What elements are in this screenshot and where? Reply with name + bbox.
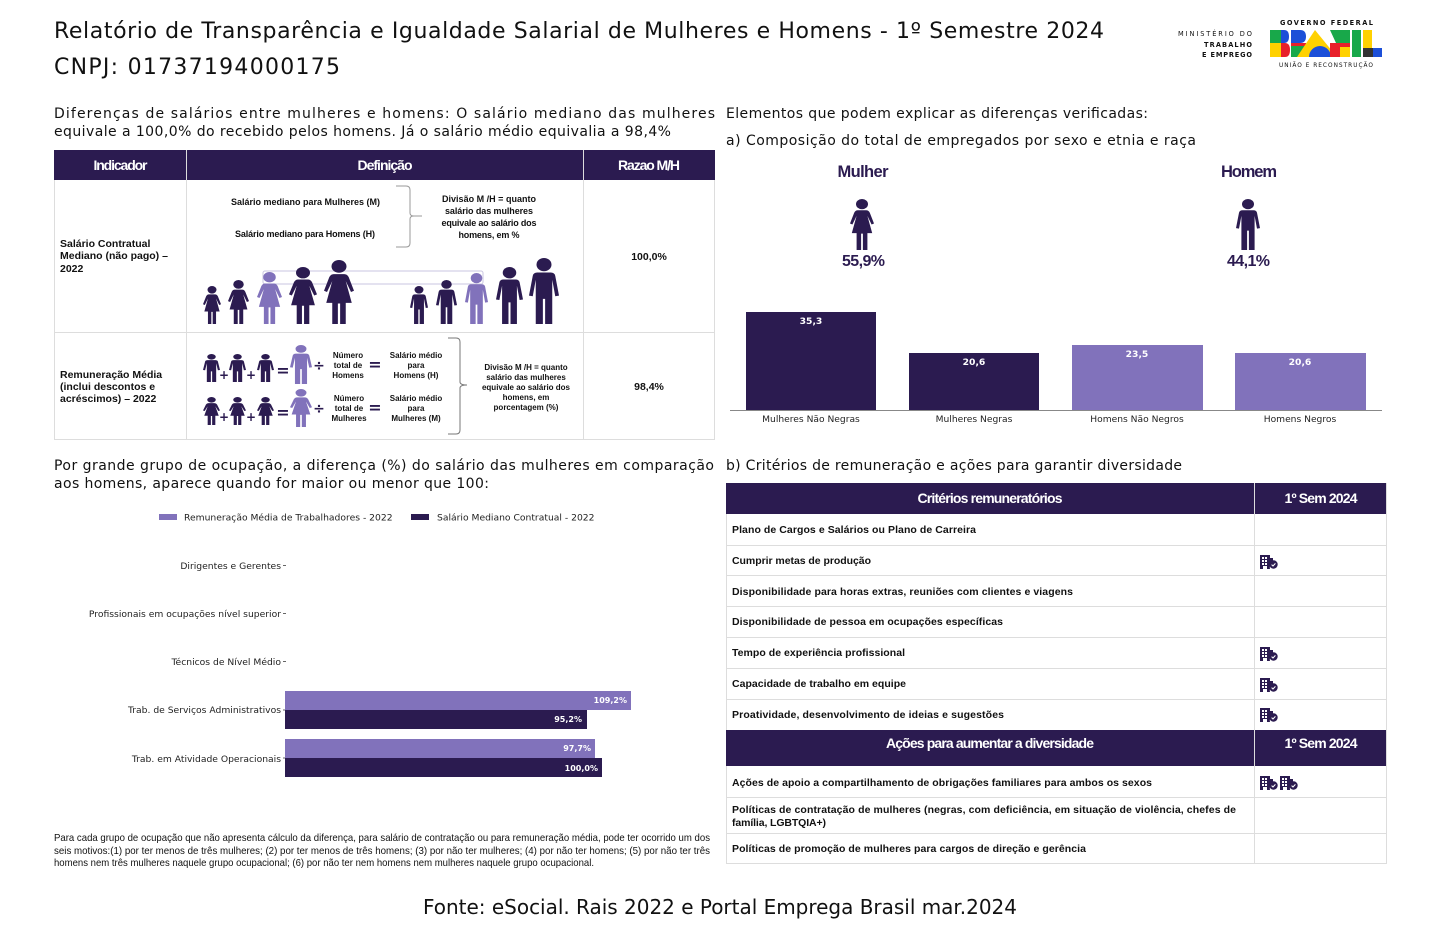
- panel: homem: [1221, 163, 1277, 270]
- text block: grande grupo de ocupação: Por grande grupo de ocupação, a diferença (%) do salário das mulheres em comparação: [54, 458, 714, 474]
- diagram: remuneração média: =: [368, 398, 382, 417]
- row label: remuneração média: [60, 369, 162, 405]
- row label: remuneração média: acréscimos) – 2022: [60, 393, 156, 405]
- diagram: remuneração média: ÷: [313, 358, 325, 374]
- text block: elementos que podem explicar: a) Composição do total de empregados por sexo e etnia e raça: [726, 133, 1196, 149]
- panel: tabela de critérios: Cumprir metas de produção: [732, 555, 871, 567]
- diagram: remuneração média: =: [276, 403, 290, 422]
- panel: tabela de critérios: Disponibilidade para horas extras, reuniões com clientes e viagens: [732, 586, 1073, 598]
- row label: remuneração média: (inclui descontos e: [60, 381, 155, 393]
- row label: salário contratual: 2022: [60, 263, 84, 275]
- diagram: remuneração média: Homens (H): [394, 371, 439, 380]
- bar chart: grupos de ocupação: 109,2%: [594, 696, 627, 705]
- bar chart: etnia e raça: 20,6: [1289, 357, 1311, 368]
- bar chart: grupos de ocupação: 95,2%: [554, 715, 582, 724]
- diagram: remuneração média: +: [246, 410, 256, 424]
- bar chart: etnia e raça: Homens Negros: [1264, 415, 1336, 425]
- logo: ministério e governo federal: TRABALHO: [1204, 41, 1252, 49]
- logo: ministério e governo federal: [1178, 19, 1382, 69]
- source footer: Fonte: eSocial. Rais 2022 e Portal Emprega Brasil mar.2024: [423, 895, 1017, 919]
- bar chart: grupos de ocupação: Técnicos de Nível Médio: [170, 657, 281, 668]
- bar chart: etnia e raça: Mulheres Negras: [936, 415, 1013, 425]
- title: CNPJ: 01737194000175: [54, 55, 340, 80]
- row label: salário contratual: [60, 238, 168, 275]
- panel: tabela de indicadores: Definição: [358, 157, 412, 173]
- diagram: remuneração média: Divisão M /H = quanto: [484, 363, 568, 372]
- panel: tabela de critérios: Critérios remuneratórios: [918, 490, 1063, 506]
- diagram: salário mediano: salário das mulheres: [445, 206, 533, 216]
- panel: mulher: Mulher: [838, 163, 889, 181]
- icons: empresa com selo: [1260, 555, 1298, 790]
- bar chart: grupos de ocupação: Profissionais em ocupações nível superior: [89, 609, 281, 620]
- panel: tabela de indicadores: [54, 150, 715, 440]
- text block: elementos que podem explicar: [726, 106, 1196, 149]
- diagram: remuneração média: salário das mulheres: [486, 373, 566, 382]
- bar chart: grupos de ocupação: 100,0%: [565, 764, 598, 773]
- diagram: remuneração média: Salário médio: [390, 394, 442, 403]
- logo: ministério e governo federal: E EMPREGO: [1202, 51, 1252, 59]
- diagram: remuneração média: Homens: [332, 371, 364, 380]
- panel: tabela de critérios: Ações de apoio a compartilhamento de obrigações familiares para ambos os sexos: [732, 777, 1152, 789]
- text block: diferenças de salários: [54, 106, 715, 140]
- diagram: remuneração média: para: [408, 361, 425, 370]
- logo: ministério e governo federal: GOVERNO FEDERAL: [1280, 19, 1374, 27]
- bar chart: etnia e raça: Homens Não Negros: [1090, 415, 1184, 425]
- chart legend: [159, 512, 594, 524]
- note: motivos de ausência: [54, 832, 710, 869]
- panel: tabela de indicadores: Razao M/H: [618, 157, 680, 173]
- panel: tabela de critérios: Políticas de promoção de mulheres para cargos de direção e gerência: [732, 843, 1086, 855]
- diagram: salário mediano: Salário mediano para Mulheres (M): [231, 197, 380, 207]
- panel: homem: Homem: [1221, 163, 1277, 181]
- bar chart: grupos de ocupação: [89, 561, 631, 777]
- diagram: remuneração média: =: [276, 361, 290, 380]
- text block: diferenças de salários: Diferenças de salários entre mulheres e homens: O salário mediano das mulheres: [54, 106, 715, 122]
- diagram: remuneração média: Mulheres: [331, 414, 367, 423]
- note: motivos de ausência: seis motivos:(1) por ter menos de três mulheres; (2) por ter menos de três homens; (3) por não ter mulheres; (4) por não ter homens; (5) por não ter três: [54, 845, 710, 857]
- diagram: remuneração média: Salário médio: [390, 351, 442, 360]
- heading: critérios de remuneração: b) Critérios de remuneração e ações para garantir diversidade: [726, 458, 1182, 474]
- panel: tabela de critérios: Tempo de experiência profissional: [732, 647, 905, 659]
- panel: tabela de critérios: Proatividade, desenvolvimento de ideias e sugestões: [732, 709, 1004, 721]
- panel: tabela de critérios: família, LGBTQIA+): [732, 817, 826, 829]
- diagram: remuneração média: Número: [333, 351, 363, 360]
- diagram: remuneração média: +: [219, 368, 229, 382]
- diagram: remuneração média: +: [219, 410, 229, 424]
- panel: mulher: [838, 163, 889, 270]
- bar chart: etnia e raça: [730, 312, 1382, 425]
- bar chart: grupos de ocupação: Dirigentes e Gerentes: [180, 561, 281, 572]
- text block: grande grupo de ocupação: aos homens, aparece quando for maior ou menor que 100:: [54, 476, 489, 492]
- diagram: salário mediano: homens, em %: [458, 230, 520, 240]
- diagram: remuneração média: equivale ao salário dos: [482, 383, 571, 392]
- panel: homem: 44,1%: [1227, 253, 1270, 270]
- diagram: remuneração média: homens, em: [503, 393, 549, 402]
- diagram: remuneração média: Mulheres (M): [391, 414, 441, 423]
- diagram: remuneração média: porcentagem (%): [494, 403, 559, 412]
- text block: diferenças de salários: equivale a 100,0% do recebido pelos homens. Já o salário médio equivalia a 98,4%: [54, 124, 671, 140]
- panel: tabela de critérios: 1º Sem 2024: [1284, 735, 1358, 751]
- diagram: remuneração média: [203, 338, 571, 434]
- note: motivos de ausência: homens nem três mulheres naquele grupo ocupacional; (6) por não ter nem homens nem mulheres naquele grupo ocupacional.: [54, 857, 594, 869]
- logo: ministério e governo federal: MINISTÉRIO DO: [1178, 29, 1252, 38]
- text block: elementos que podem explicar: Elementos que podem explicar as diferenças verificadas:: [726, 106, 1148, 122]
- diagram: remuneração média: para: [408, 404, 425, 413]
- diagram: remuneração média: total de: [335, 404, 364, 413]
- logo: ministério e governo federal: UNIÃO E RECONSTRUÇÃO: [1279, 62, 1373, 69]
- diagram: remuneração média: ÷: [313, 401, 325, 417]
- bar chart: etnia e raça: 23,5: [1126, 349, 1148, 360]
- panel: mulher: 55,9%: [842, 253, 885, 270]
- panel: tabela de critérios: [726, 483, 1386, 864]
- bar chart: grupos de ocupação: Trab. em Atividade Operacionais: [131, 754, 281, 765]
- value: razão mediana: 100,0%: [631, 251, 667, 263]
- diagram: salário mediano: [203, 186, 559, 324]
- panel: tabela de critérios: Plano de Cargos e Salários ou Plano de Carreira: [732, 524, 976, 536]
- value: razão média: 98,4%: [634, 381, 665, 393]
- bar chart: etnia e raça: 35,3: [800, 316, 822, 327]
- bar chart: etnia e raça: 20,6: [963, 357, 985, 368]
- diagram: remuneração média: Número: [334, 394, 364, 403]
- diagram: remuneração média: +: [246, 368, 256, 382]
- panel: tabela de critérios: Ações para aumentar a diversidade: [886, 735, 1094, 751]
- diagram: salário mediano: Divisão M /H = quanto: [442, 194, 536, 204]
- title: Relatório de Transparência e Igualdade Salarial de Mulheres e Homens - 1º Semestre 2024: [54, 19, 1104, 44]
- panel: tabela de critérios: Capacidade de trabalho em equipe: [732, 678, 906, 690]
- row label: remuneração média: Remuneração Média: [60, 369, 162, 381]
- panel: tabela de critérios: Disponibilidade de pessoa em ocupações específicas: [732, 616, 1003, 628]
- diagram: remuneração média: =: [368, 355, 382, 374]
- text block: grande grupo de ocupação: [54, 458, 714, 492]
- row label: salário contratual: Salário Contratual: [60, 238, 151, 250]
- title: [54, 19, 1104, 80]
- diagram: remuneração média: total de: [334, 361, 363, 370]
- diagram: salário mediano: Salário mediano para Homens (H): [235, 229, 375, 239]
- panel: tabela de critérios: Políticas de contratação de mulheres (negras, com deficiência, em situação de violência, chefes de: [732, 804, 1236, 816]
- bar chart: grupos de ocupação: 97,7%: [563, 744, 591, 753]
- chart legend: Remuneração Média de Trabalhadores - 2022: [184, 512, 393, 524]
- bar chart: etnia e raça: Mulheres Não Negras: [762, 415, 860, 425]
- panel: tabela de indicadores: Indicador: [94, 157, 148, 173]
- diagram: salário mediano: equivale ao salário dos: [442, 218, 536, 228]
- note: motivos de ausência: Para cada grupo de ocupação que não apresenta cálculo da diferença, para salário de contratação ou para remuneração média, pode ter ocorrido um dos: [54, 832, 710, 844]
- row label: salário contratual: Mediano (não pago) –: [60, 250, 168, 262]
- bar chart: grupos de ocupação: Trab. de Serviços Administrativos: [127, 705, 281, 716]
- chart legend: Salário Mediano Contratual - 2022: [437, 512, 594, 524]
- panel: tabela de critérios: 1º Sem 2024: [1284, 490, 1358, 506]
